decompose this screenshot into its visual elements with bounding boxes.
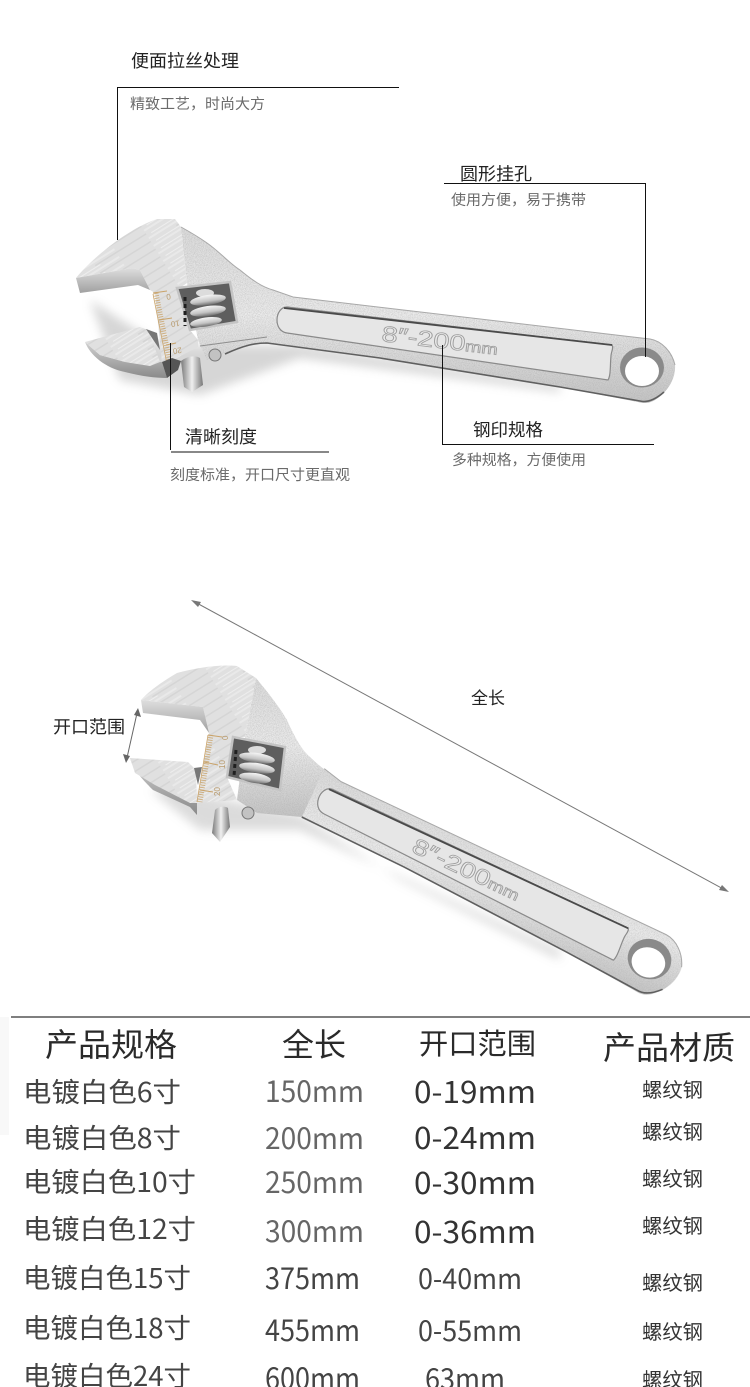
callout: stamped size <box>442 345 654 470</box>
row: 12 inch <box>23 1208 703 1252</box>
ruler scale: 10 <box>170 318 180 329</box>
ruler scale: 20 <box>213 787 222 796</box>
row: 15 inch: 电镀白色15寸 <box>23 1257 191 1296</box>
handle groove top shadow <box>317 789 640 928</box>
worm gear window <box>177 282 237 330</box>
left edge tint <box>0 1017 9 1135</box>
leader line: brushed surface <box>118 88 399 240</box>
ruler scale: 0 <box>221 735 230 740</box>
table: specifications <box>23 1020 735 1387</box>
leader line: round hole <box>444 184 646 357</box>
lower jaw face <box>130 758 197 803</box>
rivet <box>242 807 254 819</box>
ruler scale: 20 <box>172 345 182 356</box>
lower jaw face <box>85 327 160 366</box>
brushed head <box>76 219 198 363</box>
row: 8 inch: 0-24mm <box>414 1114 536 1158</box>
stamped size text: 8″-200 mm <box>380 321 500 360</box>
text: brushed surface note: 精致工艺，时尚大方 <box>130 93 265 114</box>
wrench bottom edge <box>225 343 664 402</box>
heading: stamped size: 钢印规格 <box>473 417 543 442</box>
hanging hole <box>622 933 677 985</box>
upper jaw inner face <box>76 268 150 293</box>
heading: clear scale: 清晰刻度 <box>185 424 257 449</box>
adjuster screw <box>212 807 230 842</box>
row: 6 inch: 电镀白色6寸 <box>23 1071 181 1110</box>
ruler scale: 10 <box>218 760 227 769</box>
handle body <box>283 767 705 1003</box>
row: 6 inch <box>23 1068 703 1112</box>
row: 12 inch: 300mm <box>265 1209 364 1251</box>
row: 15 inch: 375mm <box>265 1256 360 1298</box>
table header: 开口范围 <box>419 1021 536 1063</box>
row: 18 inch: 螺纹钢 <box>642 1316 703 1345</box>
brushed head <box>141 665 256 803</box>
table header <box>45 1020 735 1069</box>
row: 8 inch: 螺纹钢 <box>642 1116 703 1145</box>
row: 10 inch: 螺纹钢 <box>642 1163 703 1192</box>
callout: brushed surface <box>118 48 399 240</box>
adjuster screw <box>181 356 203 392</box>
row: 10 inch: 250mm <box>265 1160 364 1202</box>
handle top edge <box>300 769 705 967</box>
upper jaw inner face <box>141 700 209 733</box>
row: 12 inch: 电镀白色12寸 <box>23 1208 196 1247</box>
stamped size text: 8″-200 mm <box>408 833 525 906</box>
ruler scale <box>197 735 230 802</box>
row: 18 inch <box>23 1307 703 1350</box>
label: overall length: 全长 <box>471 684 505 709</box>
worm gear window <box>227 737 285 790</box>
ruler scale: 0 <box>165 292 171 301</box>
hanging hole <box>620 348 664 388</box>
wrench shadow <box>150 790 560 960</box>
jaw inner shadow <box>146 329 160 350</box>
row: 15 inch: 螺纹钢 <box>642 1267 703 1296</box>
screw dark base <box>162 358 181 378</box>
table header: 产品材质 <box>603 1023 735 1069</box>
heading: brushed surface: 便面拉丝处理 <box>131 48 239 73</box>
lower jaw underside <box>130 758 197 815</box>
row: 12 inch: 螺纹钢 <box>642 1210 703 1239</box>
row: 24 inch <box>23 1355 703 1387</box>
head body <box>237 678 343 817</box>
row: 6 inch: 0-19mm <box>414 1068 536 1112</box>
table header: 产品规格 <box>45 1020 177 1066</box>
label: opening range: 开口范围 <box>53 714 125 739</box>
row: 15 inch: 0-40mm <box>418 1258 522 1298</box>
handle groove <box>277 307 613 380</box>
text: round hole note: 使用方便，易于携带 <box>451 189 586 210</box>
callout: round hanging hole <box>451 161 586 210</box>
text: clear scale note: 刻度标准，开口尺寸更直观 <box>170 464 351 485</box>
wrench shadow <box>90 300 560 395</box>
row: 18 inch: 0-55mm <box>418 1310 522 1350</box>
handle groove top shadow <box>284 308 612 345</box>
lower jaw underside <box>85 342 167 378</box>
heading: round hole: 圆形挂孔 <box>460 161 532 186</box>
wrench 2: product photo, angled view <box>130 665 705 1003</box>
wrench 1: product photo, side view <box>76 219 675 403</box>
row: 10 inch <box>23 1159 703 1203</box>
table rule <box>11 1016 750 1018</box>
ruler scale <box>153 291 182 364</box>
row: 6 inch: 150mm <box>265 1069 364 1111</box>
handle <box>283 767 705 1003</box>
row: 12 inch: 0-36mm <box>414 1208 536 1252</box>
handle groove <box>300 786 641 962</box>
row: 10 inch: 电镀白色10寸 <box>23 1161 196 1200</box>
head lower crease <box>200 337 267 346</box>
arrow: overall length <box>191 600 729 892</box>
arrow: opening range <box>123 708 141 763</box>
row: 18 inch: 电镀白色18寸 <box>23 1307 191 1346</box>
table header: 全长 <box>282 1020 346 1066</box>
row: 8 inch: 电镀白色8寸 <box>23 1117 181 1156</box>
wrench top edge <box>181 227 675 365</box>
row: 15 inch <box>23 1256 703 1298</box>
row: 10 inch: 0-30mm <box>414 1159 536 1203</box>
callout: clear scale <box>170 343 351 485</box>
row: 8 inch <box>23 1114 703 1158</box>
leader line: stamped size <box>442 345 654 444</box>
row: 8 inch: 200mm <box>265 1116 364 1158</box>
jaw inner shadow <box>194 767 202 785</box>
row: 18 inch: 455mm <box>265 1308 360 1350</box>
leader line: clear scale <box>170 343 329 452</box>
wrench body <box>181 227 675 403</box>
text: stamped size note: 多种规格，方便使用 <box>452 449 586 470</box>
handle bottom edge <box>283 817 678 998</box>
row: 6 inch: 螺纹钢 <box>642 1074 703 1103</box>
rivet <box>209 349 221 361</box>
